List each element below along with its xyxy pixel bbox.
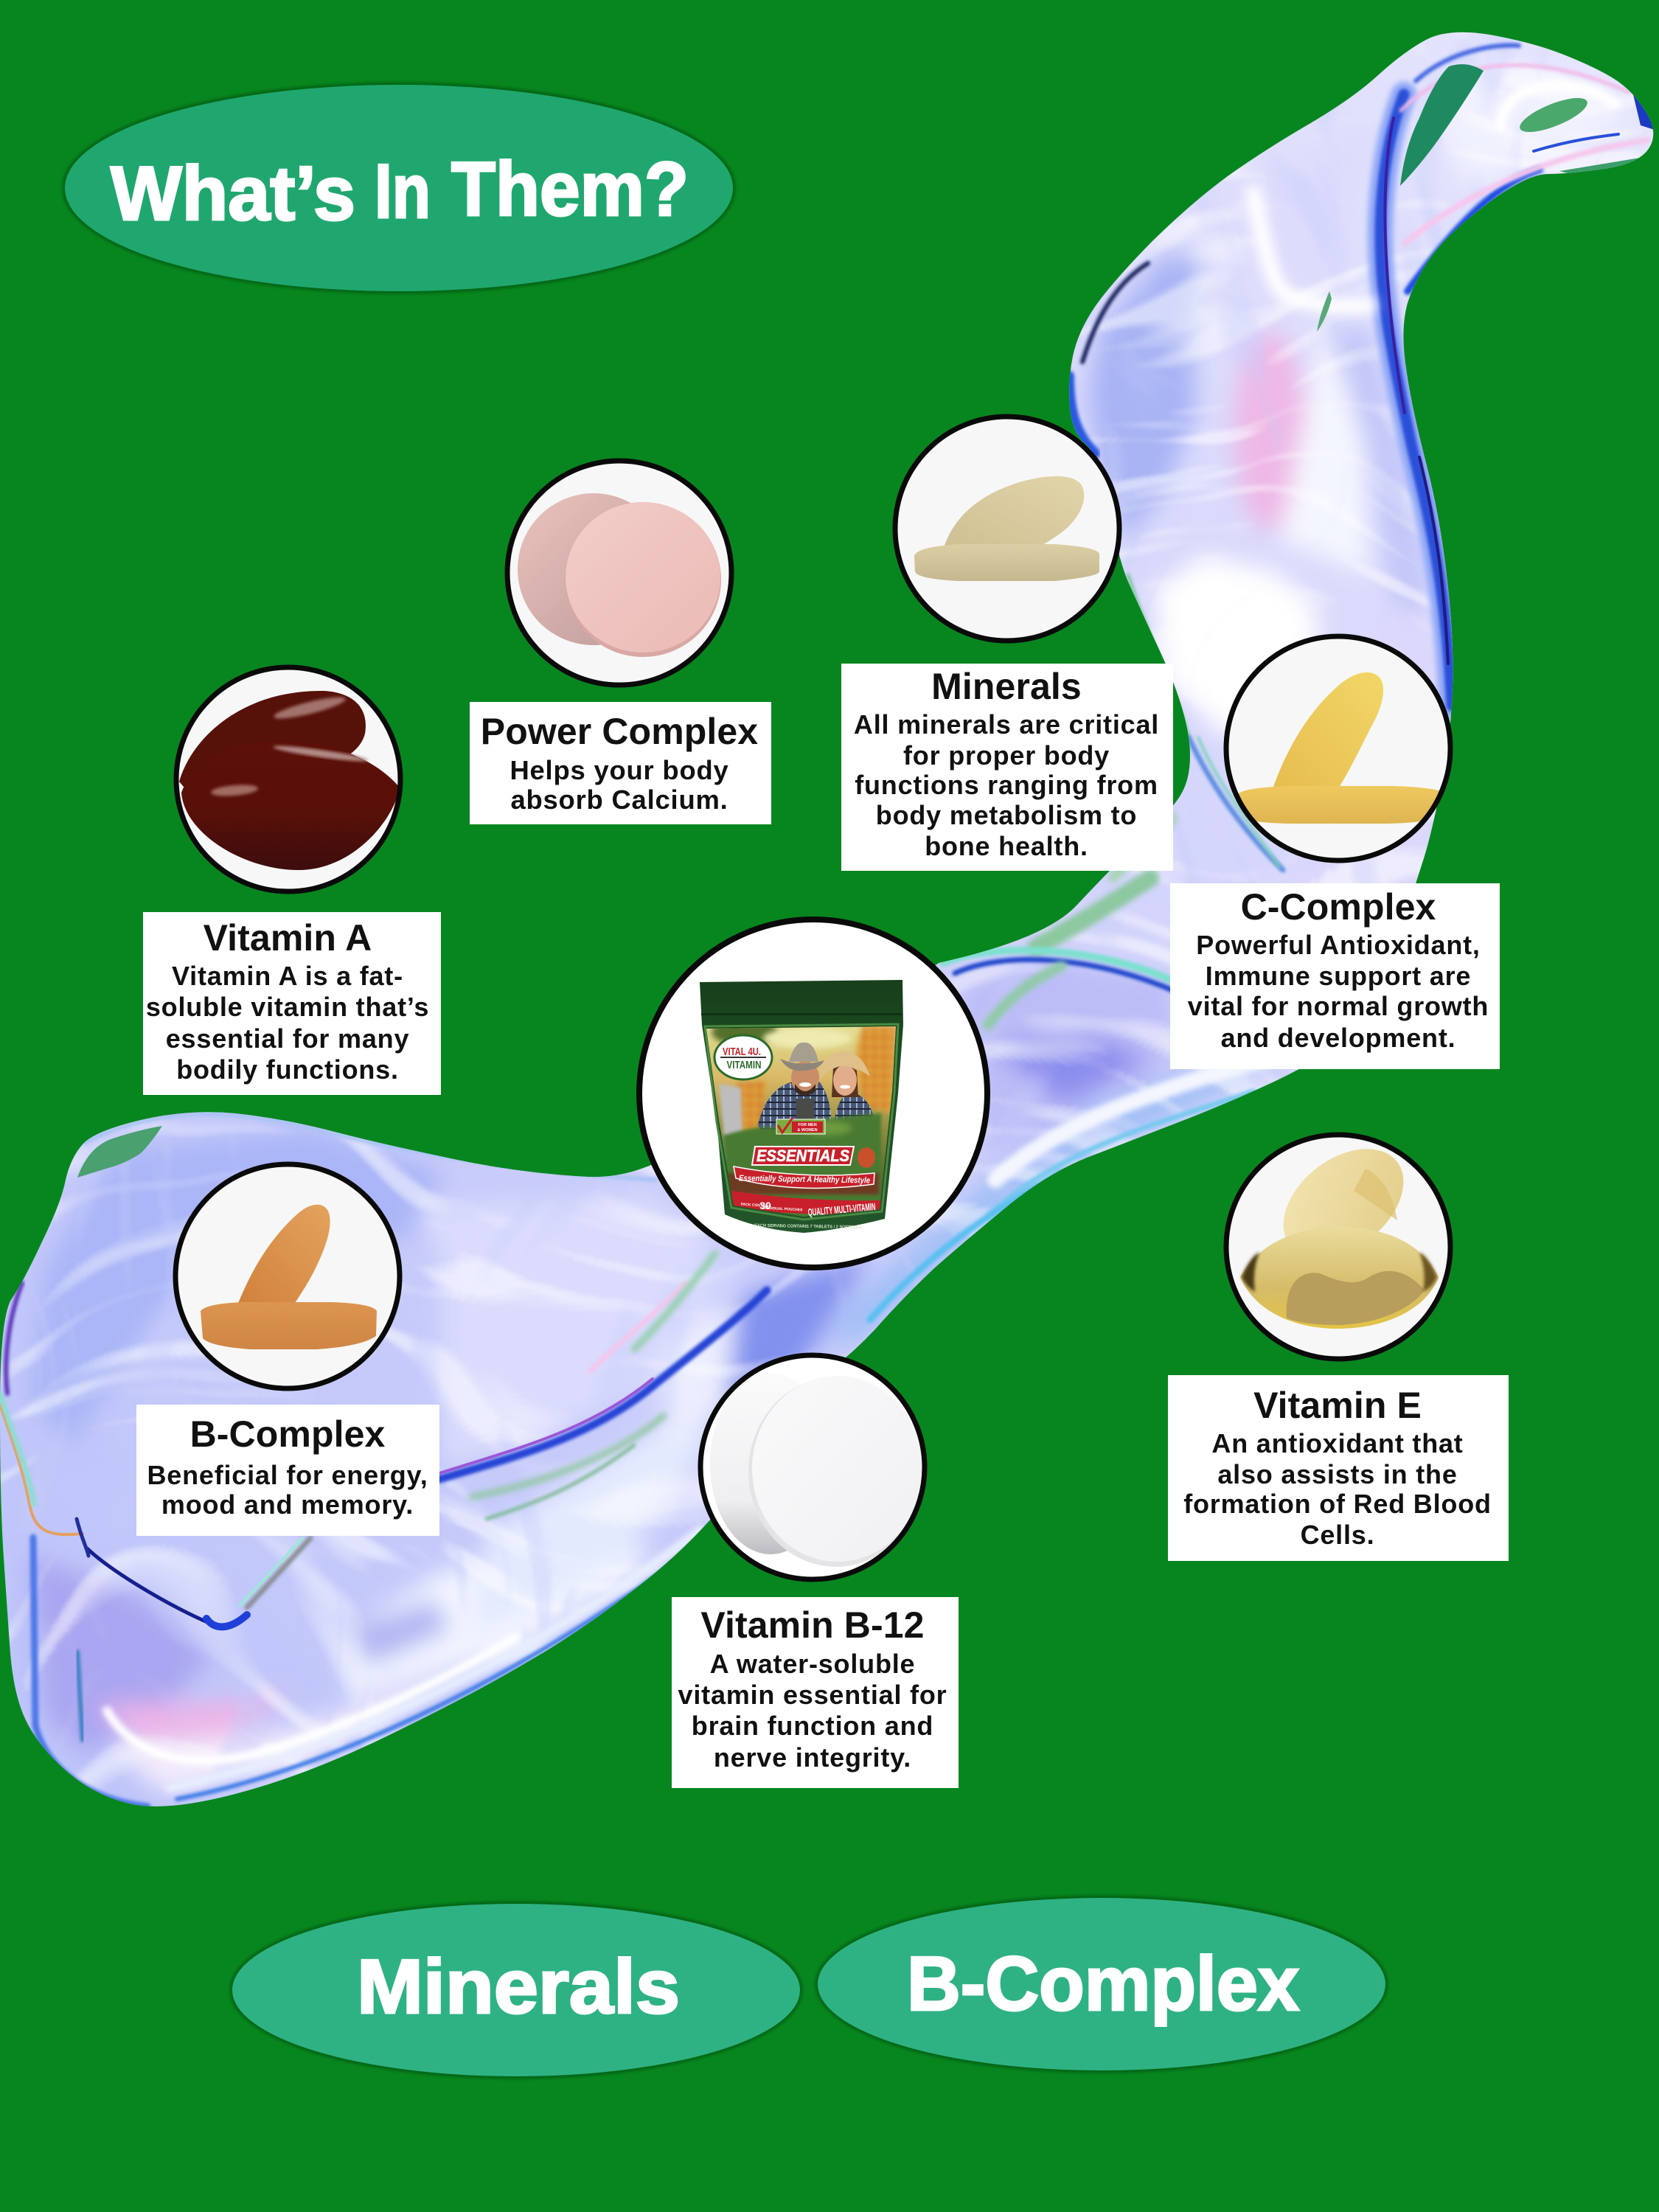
label: Vitamin E: Cells. [1301, 1520, 1374, 1550]
title banner: In [375, 149, 431, 234]
for men and women tag: FOR MEN [798, 1123, 817, 1127]
logo badge [714, 1035, 772, 1079]
bottom badge: Minerals: Minerals [357, 1944, 680, 2030]
ingredient: B-Complex [136, 1164, 439, 1536]
label: C-Complex [1170, 883, 1500, 1069]
pack info: QUALITY MULTI-VITAMIN [807, 1200, 876, 1218]
product: Essentials pouch in circle [639, 919, 987, 1267]
tagline ribbon [734, 1166, 874, 1188]
label: Power Complex: Helps your body [509, 755, 729, 785]
ingredient: C-Complex [1170, 636, 1500, 1069]
icon: maroon softgels [176, 667, 400, 891]
label: Minerals: All minerals are critical [854, 709, 1159, 740]
label: C-Complex: vital for normal growth [1188, 991, 1489, 1021]
label: Vitamin B-12: A water-soluble [710, 1649, 915, 1679]
label: Power Complex [470, 702, 771, 824]
label: Minerals: Minerals [931, 666, 1082, 707]
label: Minerals: bone health. [925, 831, 1088, 861]
rim strands [0, 45, 1648, 1806]
label: Vitamin B-12: nerve integrity. [714, 1742, 911, 1773]
label: Vitamin E: also assists in the [1217, 1459, 1458, 1489]
label: B-Complex: B-Complex [190, 1413, 385, 1455]
icon: tan tablets [895, 417, 1119, 641]
for men and women tag: & WOMEN [797, 1128, 818, 1133]
label: Vitamin B-12: brain function and [692, 1711, 933, 1741]
essentials label: ESSENTIALS [757, 1147, 849, 1165]
label: Vitamin E [1168, 1375, 1509, 1561]
title banner [64, 84, 734, 292]
ingredient: Vitamin A [143, 667, 441, 1095]
label: Minerals [841, 664, 1173, 871]
pack info [740, 1200, 876, 1230]
label: Vitamin A: Vitamin A is a fat- [172, 961, 403, 991]
label: Vitamin B-12: vitamin essential for [678, 1680, 947, 1710]
label: Vitamin A [143, 912, 441, 1095]
pack info: 30 [759, 1200, 771, 1211]
label: Vitamin A: bodily functions. [176, 1054, 399, 1085]
label: Vitamin E: An antioxidant that [1211, 1428, 1464, 1458]
pouch [700, 980, 903, 1233]
ingredient: Power Complex [470, 461, 771, 824]
title banner: Them? [451, 147, 689, 232]
bottom badge: Minerals [232, 1903, 801, 2077]
label: C-Complex: Powerful Antioxidant, [1196, 930, 1481, 960]
label: B-Complex: Beneficial for energy, [147, 1460, 428, 1490]
label: Power Complex: Power Complex [481, 711, 758, 752]
icon: white tablets [700, 1355, 925, 1579]
logo badge: VITAL 4U. [723, 1046, 761, 1058]
label: Vitamin B-12: Vitamin B-12 [700, 1604, 925, 1646]
icon: pink tablets [507, 461, 731, 685]
label: Vitamin A: soluble vitamin that’s [146, 992, 429, 1022]
ingredient: Vitamin E [1168, 1127, 1509, 1561]
bottom badge: B-Complex: B-Complex [907, 1941, 1299, 2027]
label: C-Complex: C-Complex [1241, 886, 1436, 928]
pack info: PACK CONTAINS [740, 1203, 771, 1208]
tagline ribbon: Essentially Support A Healthy Lifestyle [739, 1174, 871, 1186]
label: Minerals: body metabolism to [876, 800, 1137, 830]
bottom badge: B-Complex [817, 1897, 1386, 2071]
label: Vitamin A: Vitamin A [204, 917, 372, 959]
label: Vitamin A: essential for many [166, 1023, 409, 1054]
pack info: EACH SERVING CONTAINS 7 TABLETS / 2 SOFTGELS [754, 1224, 862, 1230]
label: Minerals: for proper body [903, 740, 1110, 771]
label: Minerals: functions ranging from [855, 770, 1158, 800]
ingredient: Minerals [841, 417, 1173, 871]
label: B-Complex: mood and memory. [161, 1489, 414, 1520]
label: Vitamin E: Vitamin E [1253, 1385, 1422, 1426]
icon: yellow tablets [1226, 636, 1450, 860]
for men and women tag [776, 1118, 825, 1134]
icon: orange tablets [175, 1164, 400, 1388]
label: Vitamin E: formation of Red Blood [1183, 1489, 1492, 1519]
reflection patches [77, 64, 1659, 1178]
label: Power Complex: absorb Calcium. [510, 785, 728, 815]
title banner: What’s [111, 151, 355, 237]
pack info: INDIVIDUAL POUCHES [762, 1206, 803, 1212]
label: Vitamin B-12 [672, 1597, 959, 1788]
logo badge: VITAMIN [727, 1059, 761, 1071]
icon: golden softgels [1226, 1127, 1450, 1359]
label: B-Complex [136, 1405, 439, 1536]
label: C-Complex: and development. [1221, 1023, 1455, 1053]
ingredient: Vitamin B-12 [672, 1355, 959, 1788]
label: C-Complex: Immune support are [1206, 961, 1471, 991]
